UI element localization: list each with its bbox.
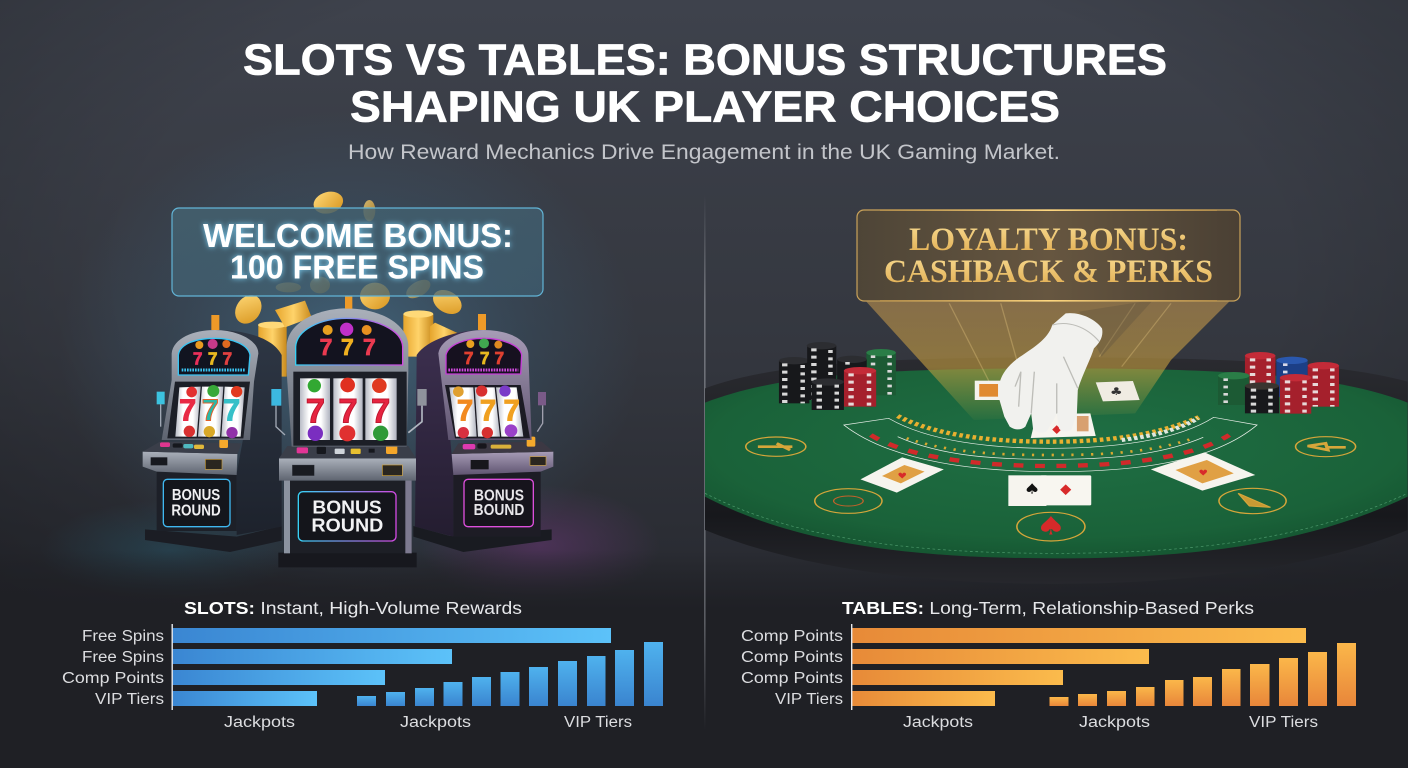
panel: slots illustration (143, 188, 553, 567)
loyalty bonus banner (857, 209, 1240, 302)
panel: table illustration (705, 300, 1408, 584)
slot machine left: ROUND (171, 503, 221, 520)
slots row labels: Free Spins (82, 649, 164, 666)
title (243, 36, 1167, 132)
playing cards near: ♦ (1057, 482, 1075, 499)
slots axis labels (224, 714, 632, 731)
welcome bonus banner: WELCOME BONUS: (203, 217, 513, 254)
slot machine left: BONUS (172, 487, 220, 504)
slot machine right: 7 (457, 395, 473, 428)
slot machine right (413, 314, 553, 552)
white glove hand (998, 300, 1153, 433)
title: SHAPING UK PLAYER CHOICES (350, 82, 1060, 132)
chart: tables rewards (741, 598, 1356, 731)
chart: slots rewards (62, 598, 663, 731)
playing cards near: ♥ (897, 472, 907, 481)
slot machine left: 7 (193, 348, 202, 368)
loyalty bonus banner: LOYALTY BONUS: (909, 222, 1188, 258)
gold bet circles (746, 437, 1356, 541)
slots axis labels: VIP Tiers (564, 714, 632, 731)
tables chart heading: TABLES: Long-Term, Relationship-Based Perks (842, 598, 1254, 618)
chip stacks right (1218, 352, 1339, 414)
tables axis labels: VIP Tiers (1249, 714, 1318, 731)
tables horizontal bars (852, 628, 1306, 706)
slots row labels: VIP Tiers (95, 691, 164, 708)
welcome bonus banner: 100 FREE SPINS (230, 248, 484, 286)
slot machine centre: 7 (338, 392, 358, 430)
tables row labels (741, 628, 843, 708)
title: SLOTS VS TABLES: BONUS STRUCTURES (243, 36, 1167, 84)
playing cards near: ♠ (1024, 481, 1041, 497)
slot machine centre: 7 (306, 392, 325, 430)
slot machine right: 7 (480, 348, 489, 368)
chip stacks left (779, 342, 896, 410)
playing cards near: ♥ (1198, 469, 1208, 478)
spade icon: ♠ (1036, 512, 1066, 541)
slots axis labels: Jackpots (400, 714, 471, 731)
loyalty bonus banner: CASHBACK & PERKS (884, 254, 1213, 290)
tables axis labels: Jackpots (903, 714, 973, 731)
welcome bonus banner (172, 208, 543, 296)
slot machine right: 7 (464, 348, 473, 368)
slot machine centre: BONUS (312, 496, 382, 517)
slot machine right: BOUND (474, 502, 524, 519)
playing cards far: ♦ (1050, 424, 1064, 437)
tables row labels: VIP Tiers (775, 691, 843, 708)
slot machine right: 7 (495, 348, 504, 368)
slots axis labels: Jackpots (224, 714, 295, 731)
slots row labels (62, 628, 164, 708)
divider (704, 195, 706, 730)
tables axis labels: Jackpots (1079, 714, 1150, 731)
table rail and felt (705, 357, 1408, 584)
tables column bars (1050, 643, 1356, 706)
slots row labels: Comp Points (62, 670, 164, 687)
playing cards near (860, 452, 1255, 506)
slot machine left: 7 (223, 394, 240, 428)
falling coins and coin stacks (230, 188, 466, 377)
tables axis labels (903, 714, 1318, 731)
slot machine left (143, 315, 285, 552)
tables row labels: Comp Points (741, 670, 843, 687)
slots row labels: Free Spins (82, 628, 164, 645)
slot machine left: 7 (179, 394, 196, 428)
slot machine left: 7 (223, 348, 232, 368)
slot machine right: 7 (480, 395, 496, 428)
light beam (866, 302, 1229, 420)
slot machine centre (278, 296, 427, 567)
playing cards far: ♣ (1110, 385, 1123, 398)
playing cards far (975, 381, 1140, 438)
slot machine left: 7 (202, 394, 219, 428)
subtitle: How Reward Mechanics Drive Engagement in the UK Gaming Market. (348, 141, 1060, 164)
slots chart heading: SLOTS: Instant, High-Volume Rewards (184, 598, 522, 618)
slots column bars (357, 642, 663, 706)
slots horizontal bars (172, 628, 611, 706)
slot machine centre: 7 (371, 392, 390, 430)
tables row labels: Comp Points (741, 649, 843, 666)
slot machine centre: 7 (363, 334, 376, 360)
slot machine centre: 7 (320, 334, 332, 360)
slot machine left: 7 (208, 348, 217, 368)
betting arcs (844, 416, 1257, 472)
slot machine centre: ROUND (311, 514, 383, 535)
slot machine centre: 7 (341, 334, 354, 360)
slot machine right: 7 (504, 395, 520, 428)
tables row labels: Comp Points (741, 628, 843, 645)
slot machine right: BONUS (474, 488, 524, 505)
